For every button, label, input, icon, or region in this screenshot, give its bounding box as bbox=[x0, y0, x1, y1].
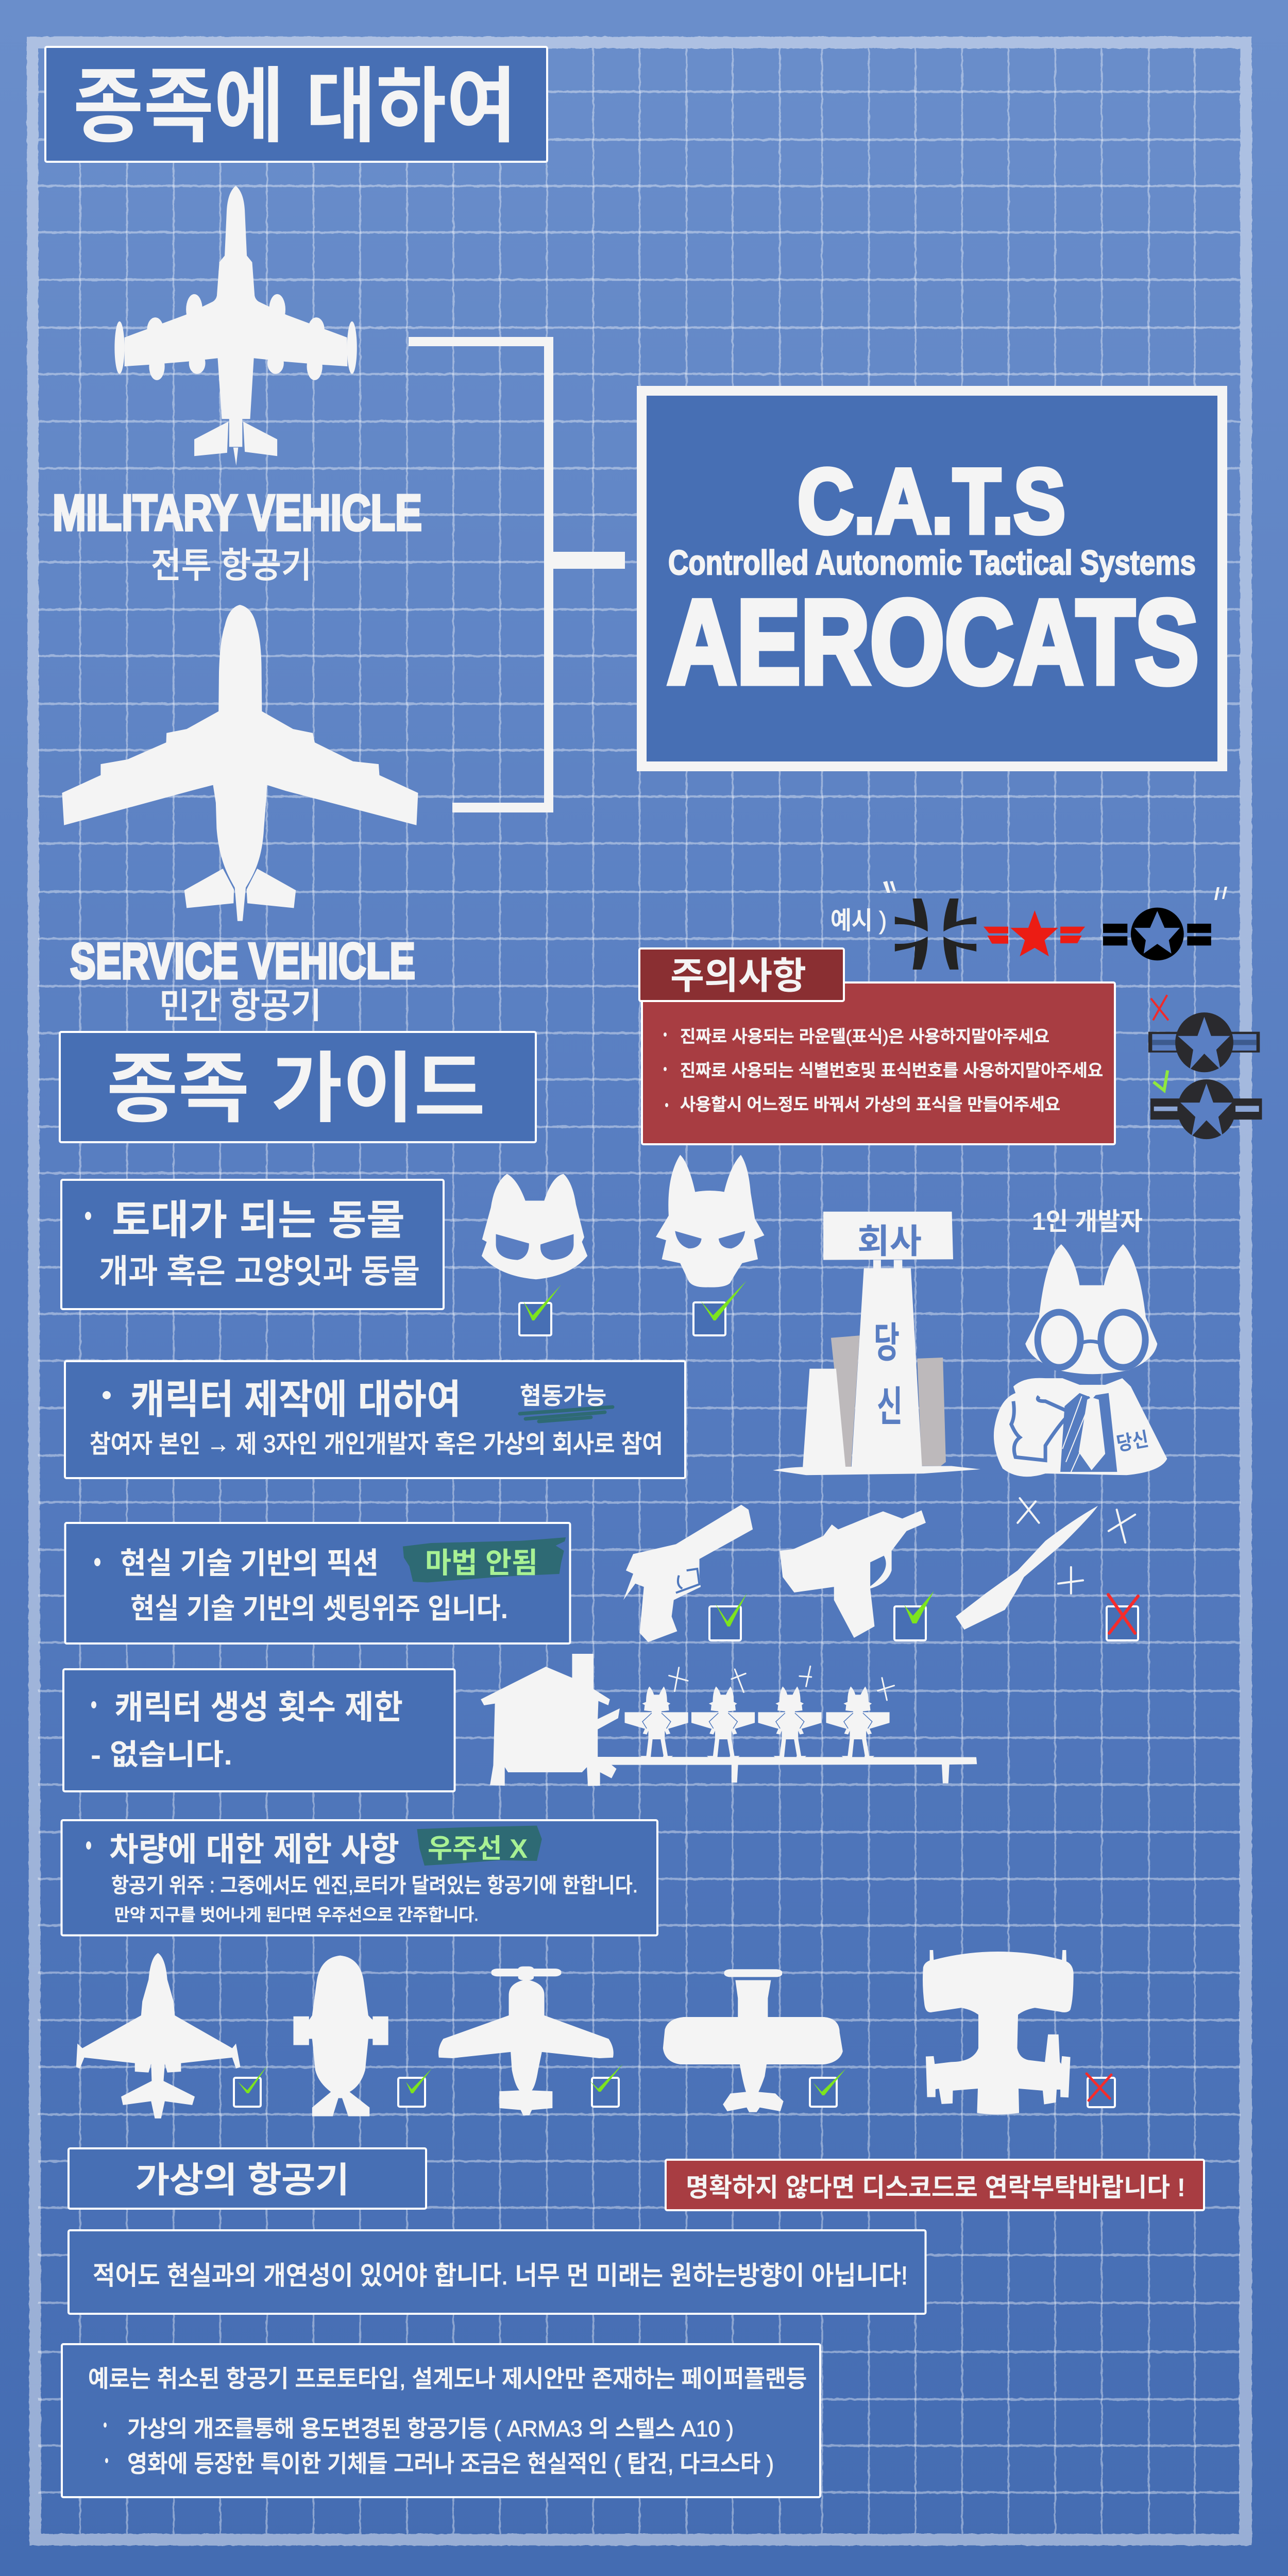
checkbox: cat ok bbox=[519, 1285, 561, 1335]
icon: wide wing plane bbox=[663, 1969, 843, 2112]
icon: twin rotor airship bbox=[293, 1956, 388, 2116]
icon: example roundel 3 black star bbox=[1103, 908, 1211, 960]
panel: character creation limit: 캐릭터 생성 횟수 제한 bbox=[114, 1689, 403, 1726]
panel: examples bbox=[62, 2344, 820, 2497]
panel: examples: 영화에 등장한 특이한 기체들 그러나 조금은 현실적인 ( 탑건, 다크스타 ) bbox=[127, 2450, 774, 2477]
panel: fiction based on real technology: 현실 기술 기반의 픽션 bbox=[120, 1547, 379, 1580]
checkbox: jet ok bbox=[234, 2065, 267, 2107]
panel: fictional aircraft heading bbox=[69, 2148, 426, 2209]
icon: rejected spacecraft bbox=[923, 1950, 1074, 2114]
icon: pistol bbox=[623, 1505, 753, 1642]
label: solo developer: 1인 개발자 bbox=[1032, 1208, 1143, 1235]
icon: example roundel 1 bbox=[896, 899, 975, 969]
panel: C.A.T.S AEROCATS: C.A.T.S bbox=[798, 450, 1065, 552]
panel: character creation: 협동가능 bbox=[520, 1382, 606, 1409]
label: 전투 항공기: 전투 항공기 bbox=[151, 546, 312, 585]
checkbox: wide plane ok bbox=[810, 2069, 846, 2107]
bracket connector bbox=[409, 337, 625, 812]
heading: species guide: 종족 가이드 bbox=[107, 1045, 485, 1132]
panel: plausibility note: 적어도 현실과의 개연성이 있어야 합니다. 너무 먼 미래는 원하는방향이 아닙니다! bbox=[93, 2261, 908, 2290]
panel: cautions: 진짜로 사용되는 식별번호및 표식번호를 사용하지말아주세요 bbox=[680, 1061, 1103, 1080]
panel: vehicle restrictions: 만약 지구를 벗어나게 된다면 우주선으로 간주합니다. bbox=[114, 1905, 479, 1924]
icon: propeller plane bbox=[438, 1967, 614, 2115]
callout: contact on discord bbox=[666, 2160, 1204, 2210]
panel: cautions: 사용할시 어느정도 바꿔서 가상의 표식을 만들어주세요 bbox=[680, 1095, 1060, 1114]
icon: approved roundel with check bbox=[1150, 1071, 1262, 1139]
label: 민간 항공기: 민간 항공기 bbox=[159, 987, 321, 1026]
checkbox: gun ok bbox=[894, 1591, 934, 1640]
panel: cautions: 진짜로 사용되는 라운델(표식)은 사용하지말아주세요 bbox=[680, 1027, 1049, 1046]
text: 당신 on lapel: 당신 bbox=[1115, 1429, 1150, 1455]
panel: base animal: 개과 혹은 고양잇과 동물 bbox=[99, 1253, 420, 1290]
label: service vehicle: SERVICE VEHICLE bbox=[70, 933, 415, 989]
text: 회사 sign: 회사 bbox=[857, 1222, 922, 1260]
panel: cautions bbox=[639, 948, 1115, 1144]
panel: examples: 예로는 취소된 항공기 프로토타입, 설계도나 제시안만 존재하는 페이퍼플랜등 bbox=[88, 2365, 807, 2392]
icon: character row bbox=[625, 1666, 894, 1758]
panel: character creation limit: - 없습니다. bbox=[91, 1738, 232, 1771]
panel: character creation: 캐릭터 제작에 대하여 bbox=[130, 1377, 461, 1422]
checkbox: airship ok bbox=[398, 2069, 432, 2107]
icon: example roundel 2 red star bbox=[984, 910, 1085, 956]
panel: character creation bbox=[65, 1361, 685, 1478]
icon: military aircraft silhouette bbox=[114, 185, 357, 466]
icon: company building bbox=[773, 1212, 980, 1475]
example label: 예시 ) bbox=[831, 907, 887, 935]
text: tower 신: 신 bbox=[877, 1384, 903, 1430]
checkbox: sword rejected bbox=[1107, 1595, 1138, 1640]
quote mark left bbox=[883, 881, 896, 893]
label: military vehicle: MILITARY VEHICLE bbox=[53, 484, 422, 541]
panel: C.A.T.S AEROCATS bbox=[642, 391, 1222, 767]
panel: vehicle restrictions: 항공기 위주 : 그중에서도 엔진,로터가 달려있는 항공기에 한합니다. bbox=[111, 1874, 638, 1897]
panel: character creation: 참여자 본인 → 제 3자인 개인개발자 혹은 가상의 회사로 참여 bbox=[90, 1431, 663, 1458]
icon: wolf head bbox=[656, 1155, 765, 1287]
checkbox: spacecraft rejected bbox=[1087, 2074, 1115, 2107]
checkbox: prop plane ok bbox=[590, 2064, 623, 2107]
panel: fiction based on real technology: 현실 기술 기반의 셋팅위주 입니다. bbox=[130, 1592, 508, 1624]
panel: fictional aircraft heading: 가상의 항공기 bbox=[135, 2161, 349, 2200]
panel: base animal: 토대가 되는 동물 bbox=[112, 1197, 405, 1243]
panel: character creation limit bbox=[63, 1669, 454, 1791]
checkbox: wolf ok bbox=[693, 1281, 747, 1335]
icon: cat head bbox=[482, 1174, 587, 1279]
icon: wrong roundel with red x bbox=[1148, 995, 1260, 1072]
panel: cautions: 주의사항 bbox=[670, 956, 806, 997]
icon: submachine gun bbox=[779, 1511, 926, 1638]
quote mark right bbox=[1214, 887, 1227, 900]
panel: plausibility note bbox=[69, 2230, 925, 2314]
panel: fiction based on real technology: 마법 안됨 bbox=[425, 1547, 538, 1579]
icon: service aircraft silhouette bbox=[62, 605, 418, 921]
icon: hangar with rack bbox=[481, 1654, 977, 1786]
text: tower 당: 당 bbox=[874, 1320, 900, 1366]
checkbox: pistol ok bbox=[709, 1593, 747, 1640]
panel: examples: 가상의 개조를통해 용도변경된 항공기등 ( ARMA3 의 스텔스 A10 ) bbox=[127, 2416, 734, 2442]
heading: species guide bbox=[60, 1032, 536, 1142]
panel: vehicle restrictions bbox=[62, 1820, 657, 1935]
icon: sword with sparkles bbox=[956, 1498, 1135, 1630]
title: 종족에 대하여 bbox=[73, 60, 517, 152]
panel: base animal bbox=[61, 1180, 444, 1309]
icon: jet fighter bbox=[76, 1953, 241, 2119]
panel: vehicle restrictions: 차량에 대한 제한 사항 bbox=[109, 1831, 399, 1868]
panel: fiction based on real technology bbox=[65, 1523, 570, 1643]
callout: contact on discord: 명확하지 않다면 디스코드로 연락부탁바랍니다 ! bbox=[686, 2173, 1185, 2202]
panel: vehicle restrictions: 우주선 X bbox=[428, 1834, 528, 1864]
icon: cat developer with glasses bbox=[994, 1244, 1167, 1477]
